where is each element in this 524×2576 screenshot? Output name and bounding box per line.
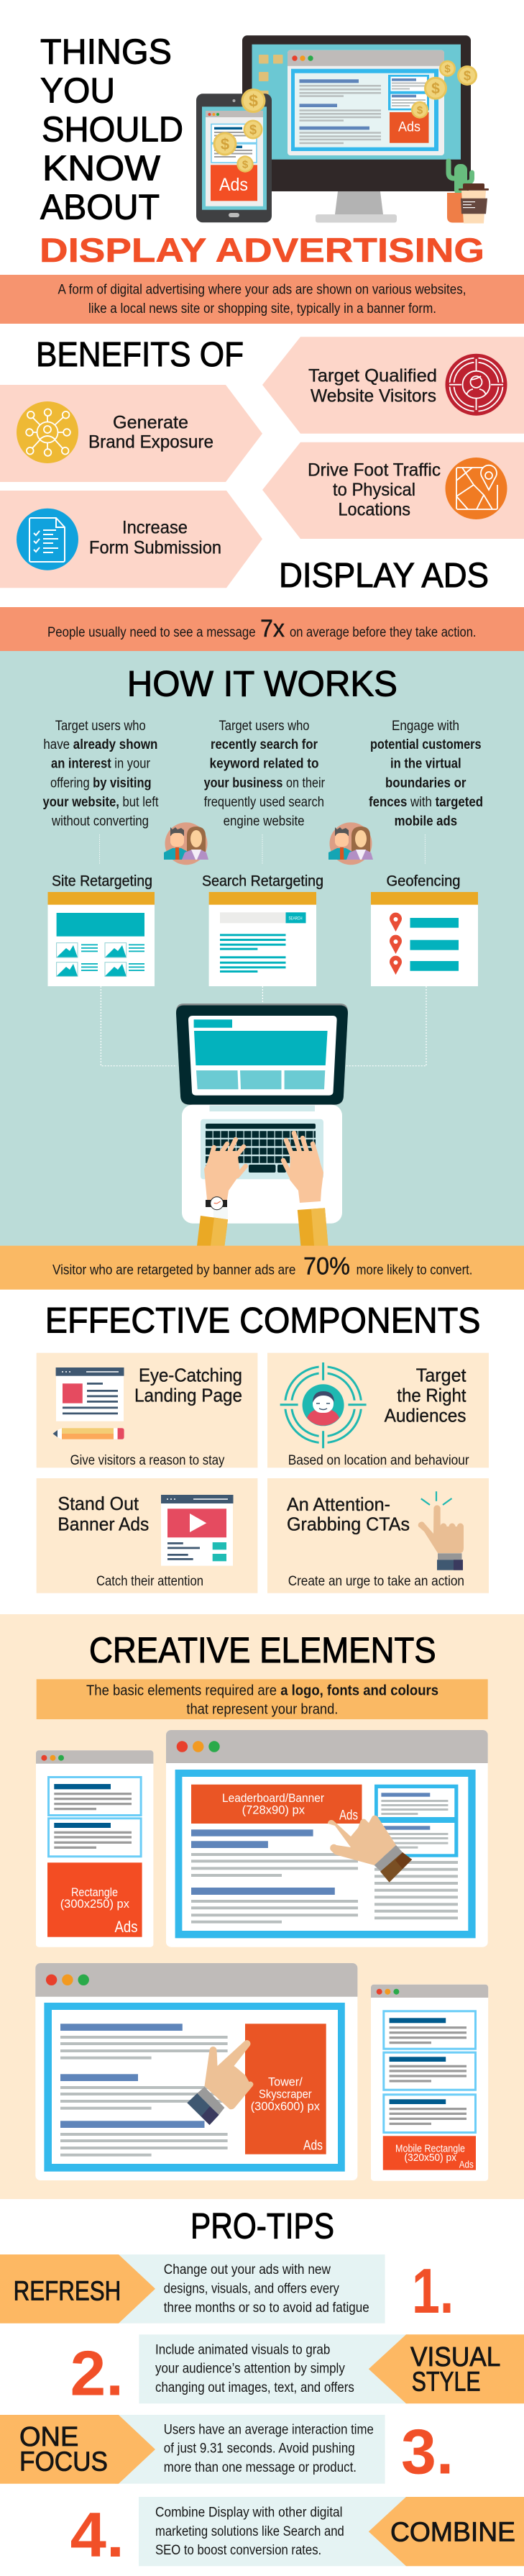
- label: Target: [416, 1365, 466, 1386]
- banner: 7x stat: People usually need to see a message: [47, 625, 256, 640]
- ad: tower 300x600: Tower/: [268, 2075, 303, 2088]
- label: [89, 518, 221, 558]
- icon: video ad page: [161, 1495, 233, 1566]
- icon: target: [446, 354, 507, 416]
- heading: creative elements: CREATIVE ELEMENTS: [89, 1630, 436, 1670]
- icon: gold coins: $: [221, 135, 229, 153]
- icon: people 1: [164, 822, 208, 865]
- caption: Create an urge to take an action: [288, 1574, 464, 1589]
- panel: tip 4 combine: Combine Display with other digital: [155, 2505, 342, 2520]
- illustration: desktop monitor: Ads: [398, 119, 420, 135]
- panel: site retargeting: [47, 873, 155, 986]
- icon: network: [17, 401, 78, 463]
- ad: tower 300x600: Ads: [303, 2139, 323, 2154]
- panel: rectangle ad browser: [36, 1750, 153, 1947]
- ad: leaderboard 728x90: Leaderboard/Banner: [222, 1791, 324, 1805]
- panel: tip 2 visual style: STYLE: [412, 2367, 480, 2397]
- section: header: [0, 32, 524, 324]
- ad: tower 300x600: [245, 2024, 326, 2154]
- panel: target the right audiences: [267, 1353, 489, 1468]
- icon: checklist document: [17, 509, 78, 570]
- panel: tip 1 refresh: 1.: [412, 2255, 454, 2326]
- banner: 7x stat: 7x: [260, 615, 285, 642]
- label: [385, 1365, 466, 1426]
- label: Website Visitors: [311, 386, 436, 406]
- label: the Right: [397, 1385, 466, 1406]
- panel: tip 3 one focus: more than one message or product.: [164, 2460, 357, 2475]
- caption: Catch their attention: [96, 1574, 203, 1589]
- ad: rectangle 300x250: Ads: [115, 1918, 138, 1936]
- panel: tip 1 refresh: [0, 2254, 454, 2326]
- panel: tip 3 one focus: ONE: [19, 2422, 78, 2452]
- heading: benefits of: BENEFITS OF: [36, 336, 244, 374]
- panel: attention-grabbing CTAs: [267, 1478, 489, 1593]
- illustration: tablet: Ads: [219, 175, 248, 195]
- label: Geofencing: [387, 873, 460, 890]
- panel: tip 1 refresh: designs, visuals, and offers every: [164, 2281, 339, 2296]
- banner: definition: [0, 275, 524, 324]
- illustration: desktop monitor: [242, 35, 471, 223]
- icon: gold coins: $: [249, 91, 258, 110]
- title: things you should know about: SHOULD: [42, 111, 183, 150]
- label: Eye-Catching: [139, 1365, 242, 1386]
- label: Stand Out: [58, 1493, 139, 1514]
- panel: leaderboard ad browser: [166, 1730, 488, 1947]
- title: things you should know about: THINGS: [40, 32, 172, 71]
- icon: people 2: [328, 822, 373, 865]
- heading: display ads: DISPLAY ADS: [279, 557, 489, 595]
- panel: geofencing: [371, 873, 478, 986]
- banner: definition: A form of digital advertising where your ads are shown on various websites,: [58, 282, 466, 297]
- ad: mobile rectangle 320x50: Mobile Rectangle: [395, 2143, 465, 2155]
- panel: tip 2 visual style: 2.: [70, 2337, 124, 2408]
- text: geofencing description: potential customers: [370, 737, 482, 752]
- panel: stand out banner ads: [37, 1478, 257, 1593]
- text: site retargeting description: Target users who: [55, 719, 146, 734]
- label: Banner Ads: [58, 1513, 149, 1534]
- panel: increase form submission: [0, 491, 262, 588]
- caption: Based on location and behaviour: [288, 1453, 469, 1468]
- callout: basic elements: that represent your brand.: [186, 1702, 338, 1718]
- panel: generate brand exposure: [0, 385, 262, 482]
- text: site retargeting description: [43, 719, 159, 829]
- ad: mobile rectangle 320x50: Ads: [459, 2158, 474, 2170]
- text: geofencing description: [369, 719, 483, 829]
- title: things you should know about: YOU: [40, 72, 115, 111]
- panel: tip 1 refresh: three months or so to avoid ad fatigue: [164, 2300, 369, 2316]
- text: geofencing description: fences with targeted: [369, 795, 483, 810]
- label: [308, 366, 437, 406]
- icon: gold coins: $: [464, 69, 471, 83]
- panel: tip 2 visual style: Include animated visuals to grab: [155, 2342, 330, 2357]
- panel: tip 1 refresh: REFRESH: [14, 2276, 121, 2306]
- ad: leaderboard 728x90: Ads: [339, 1808, 358, 1823]
- text: search retargeting description: Target users who: [219, 719, 309, 734]
- label: Brand Exposure: [88, 432, 213, 452]
- text: search retargeting description: [204, 719, 326, 829]
- label: An Attention-: [287, 1493, 390, 1515]
- panel: tip 4 combine: 4.: [70, 2499, 124, 2570]
- text: geofencing description: Engage with: [392, 719, 459, 734]
- panel: tip 3 one focus: 3.: [401, 2416, 454, 2487]
- ad: leaderboard 728x90: [191, 1785, 362, 1824]
- panel: tip 4 combine: SEO to boost conversion rates.: [155, 2543, 321, 2558]
- ad: leaderboard 728x90: (728x90) px: [242, 1803, 305, 1817]
- icon: gold coins: $: [242, 158, 249, 171]
- icon: pointing hand: [418, 1491, 464, 1570]
- text: site retargeting description: your website, but left: [43, 795, 159, 810]
- panel: mobile rectangle browser: [371, 1985, 488, 2181]
- icon: gold coins: [213, 60, 477, 173]
- banner: 7x stat: [0, 607, 524, 651]
- ad: rectangle 300x250: (300x250) px: [60, 1897, 129, 1911]
- label: Landing Page: [134, 1385, 242, 1406]
- callout: basic elements: The basic elements required are a logo, fonts and colours: [86, 1683, 438, 1699]
- label: Drive Foot Traffic: [308, 460, 441, 481]
- title: things you should know about: [40, 32, 183, 227]
- label: [88, 413, 213, 452]
- section: benefits of display ads: [0, 336, 524, 651]
- panel: search retargeting: SEARCH: [289, 916, 302, 921]
- banner: definition: like a local news site or shopping site, typically in a banner form.: [88, 301, 436, 317]
- text: site retargeting description: have already shown: [43, 737, 157, 752]
- ad: rectangle 300x250: Rectangle: [71, 1885, 118, 1899]
- banner: 70% stat: 70%: [303, 1253, 350, 1280]
- label: [308, 460, 441, 520]
- panel: eye-catching landing page: [37, 1353, 257, 1468]
- label: Increase: [122, 518, 188, 538]
- banner: 7x stat: on average before they take action.: [290, 625, 476, 640]
- heading: display advertising: DISPLAY ADVERTISING: [40, 231, 484, 269]
- label: [58, 1493, 149, 1534]
- panel: drive foot traffic: [262, 442, 524, 539]
- heading: effective components: EFFECTIVE COMPONENTS: [45, 1301, 481, 1341]
- ad: tower 300x600: (300x600) px: [251, 2099, 320, 2113]
- label: Generate: [113, 413, 188, 433]
- ad: rectangle 300x250: [47, 1862, 142, 1937]
- section: effective components: [37, 1301, 489, 1593]
- icon: hand pointing at tower: [187, 2040, 253, 2125]
- section: creative elements: [0, 1614, 524, 2199]
- banner: 70% stat: [0, 1246, 524, 1290]
- icon: gold coins: $: [444, 63, 451, 75]
- text: site retargeting description: an interest in your: [51, 757, 151, 772]
- panel: tip 4 combine: COMBINE: [390, 2517, 515, 2547]
- panel: tip 2 visual style: your audience’s attention by simply: [155, 2361, 345, 2376]
- banner: 70% stat: more likely to convert.: [357, 1263, 472, 1278]
- panel: tip 4 combine: [70, 2497, 524, 2570]
- section: how it works: [0, 651, 524, 1290]
- text: search retargeting description: engine website: [224, 814, 305, 829]
- text: site retargeting description: offering by visiting: [50, 775, 152, 791]
- label: Grabbing CTAs: [287, 1514, 410, 1535]
- text: search retargeting description: keyword related to: [210, 757, 319, 772]
- panel: tip 2 visual style: changing out images, text, and offers: [155, 2380, 354, 2395]
- panel: tip 3 one focus: Users have an average interaction time: [164, 2422, 374, 2437]
- caption: Give visitors a reason to stay: [70, 1453, 225, 1468]
- label: [287, 1493, 410, 1535]
- icon: landing page with pencil: [53, 1367, 124, 1439]
- panel: tip 4 combine: marketing solutions like Search and: [155, 2524, 344, 2539]
- panel: tip 2 visual style: [70, 2334, 524, 2408]
- text: geofencing description: mobile ads: [395, 814, 457, 829]
- panel: search retargeting: [202, 873, 323, 986]
- section: pro-tips: [0, 2206, 524, 2570]
- heading: pro-tips: PRO-TIPS: [190, 2206, 334, 2247]
- icon: gold coins: $: [249, 122, 257, 137]
- callout: basic elements: [37, 1679, 488, 1719]
- panel: tip 3 one focus: [0, 2415, 454, 2487]
- panel: tower ad browser: [35, 1963, 357, 2180]
- label: Audiences: [385, 1404, 466, 1426]
- icon: gold coins: $: [431, 81, 440, 97]
- label: Target Qualified: [308, 366, 437, 386]
- panel: tip 1 refresh: Change out your ads with new: [164, 2262, 331, 2277]
- icon: map pin: [446, 458, 507, 519]
- icon: cactus and coffee cup: [447, 161, 489, 223]
- panel: target qualified website visitors: [262, 337, 524, 434]
- illustration: tablet: [196, 94, 272, 222]
- text: geofencing description: boundaries or: [385, 775, 466, 791]
- text: geofencing description: in the virtual: [390, 757, 461, 772]
- label: Locations: [338, 500, 410, 520]
- label: Form Submission: [89, 538, 221, 558]
- title: things you should know about: ABOUT: [40, 188, 160, 227]
- panel: tip 3 one focus: FOCUS: [19, 2447, 108, 2477]
- label: Site Retargeting: [52, 873, 152, 890]
- label: to Physical: [333, 480, 415, 500]
- ad: mobile rectangle 320x50: (320x50) px: [404, 2152, 456, 2164]
- ad: mobile rectangle 320x50: [383, 2136, 476, 2170]
- icon: audience target: [279, 1360, 368, 1450]
- text: search retargeting description: recently search for: [211, 737, 318, 752]
- illustration: laptop with hands: [176, 1003, 348, 1246]
- icon: hand pointing at banner: [328, 1816, 412, 1883]
- panel: tip 2 visual style: VISUAL: [410, 2342, 500, 2372]
- ad: tower 300x600: Skyscraper: [259, 2088, 312, 2101]
- text: search retargeting description: frequently used search: [204, 795, 324, 810]
- heading: how it works: HOW IT WORKS: [127, 664, 397, 704]
- label: Search Retargeting: [202, 873, 323, 890]
- text: search retargeting description: your business on their: [204, 775, 326, 791]
- label: [134, 1365, 242, 1406]
- icon: gold coins: $: [417, 104, 423, 117]
- text: site retargeting description: without converting: [51, 814, 149, 829]
- panel: tip 3 one focus: of just 9.31 seconds. Avoid pushing: [164, 2441, 355, 2456]
- title: things you should know about: KNOW: [42, 150, 161, 188]
- banner: 70% stat: Visitor who are retargeted by banner ads are: [52, 1263, 295, 1278]
